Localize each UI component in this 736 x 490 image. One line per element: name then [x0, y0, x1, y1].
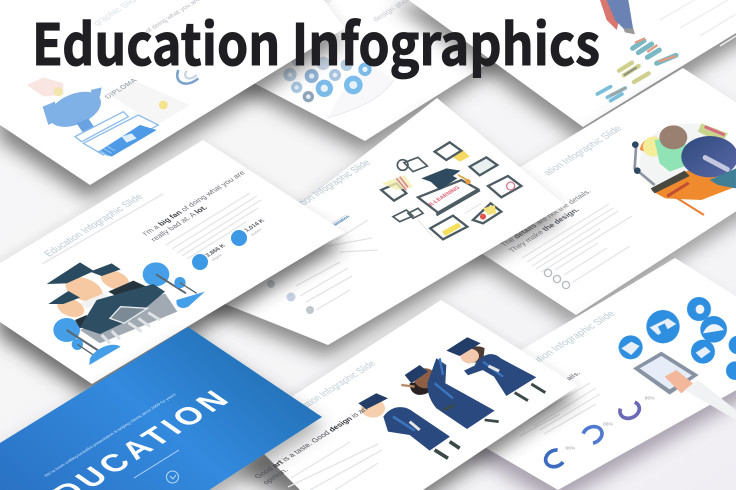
- icon: cover play circle: [134, 450, 179, 483]
- stat: 1,014 K: student: [250, 228, 263, 237]
- chart: faded gauge: [254, 24, 278, 36]
- text: big fan statement: I'm a big fan of doing what you are: [140, 169, 247, 237]
- panel: blue cover slide: [0, 327, 325, 490]
- text: lower left list: [267, 215, 378, 314]
- panel: graduates and university slide: [0, 140, 345, 397]
- text: cover tagline: We've been crafting beautiful presentation & helping clients since 2009 for years: [43, 392, 177, 478]
- figure: graduate right: [446, 337, 545, 401]
- text: small heading: animation: [329, 214, 351, 229]
- label: diploma: DIPLOMA: [104, 77, 139, 100]
- illustration: tablet and hand: [633, 352, 736, 420]
- illustration: e-learning laptop and devices: [381, 142, 521, 239]
- icon: rocket and book stacks: [597, 0, 676, 101]
- icon: piggy bank on books: [27, 70, 198, 157]
- illustration: three graduates: [358, 337, 545, 458]
- text: rocket slide copy: [660, 0, 736, 46]
- icon: chat bubbles: [283, 57, 393, 117]
- heading: slide title: ation Infographic Slide: [300, 360, 379, 410]
- text: body lines and checklist: [522, 204, 632, 289]
- stat: 2,866 K: [192, 243, 228, 270]
- heading: education infographic slide: Education Infographic Slide: [42, 193, 146, 259]
- panel: icons and tablet slide: [419, 258, 736, 490]
- text: good art: opinion.: [260, 467, 290, 486]
- icons: blue circles: 86%: [565, 445, 576, 451]
- icons: blue circles: 86%: [603, 421, 614, 427]
- figure: graduate left: [358, 393, 460, 458]
- text: the details: They make the design.: [506, 206, 581, 254]
- stat: 1,014 K: [231, 218, 267, 246]
- panel: rocket and books slide: [393, 0, 736, 141]
- figure: graduate jumping: [401, 358, 499, 429]
- heading: slide title: ation Infographic Slide: [293, 159, 374, 210]
- heading: slide title: ation Infographic Slide: [530, 310, 618, 366]
- heading: slide title: ation Infographic Slide: [541, 124, 625, 178]
- stat: 2,866 K: degree: [211, 253, 223, 262]
- icons: blue circles: [543, 297, 736, 470]
- text: good art: Good art is a taste. Good design is an: [252, 405, 370, 480]
- text: the details: The details are not the details.: [498, 188, 593, 248]
- icons: blue circles: 86%: [645, 395, 655, 401]
- illustration: graduates and university building: [47, 262, 205, 365]
- stat: 2,866 K: 2,866 K: [205, 243, 228, 258]
- chart: ring gauges: [543, 398, 642, 470]
- text: etails label: etails.: [560, 371, 582, 385]
- panel: graduates slide: [238, 300, 578, 490]
- text: good art body lines: [288, 442, 382, 490]
- text: big fan statement: really bad at. A lot.: [148, 204, 209, 243]
- panel: chat bubbles slide: [198, 0, 620, 153]
- illustration: student at desk: [632, 123, 736, 215]
- panel: e-learning slide: [188, 98, 565, 357]
- illustration: e-learning laptop and devices: E-LEARNING: [428, 185, 462, 207]
- stat: 1,014 K: 1,014 K: [244, 218, 267, 233]
- panel: piggy bank slide: [0, 0, 345, 199]
- panel: student at desk slide: [430, 68, 736, 327]
- title: Education Infographics: [32, 0, 600, 82]
- text: paragraph lines: [42, 193, 261, 264]
- text: body lines: [520, 383, 600, 436]
